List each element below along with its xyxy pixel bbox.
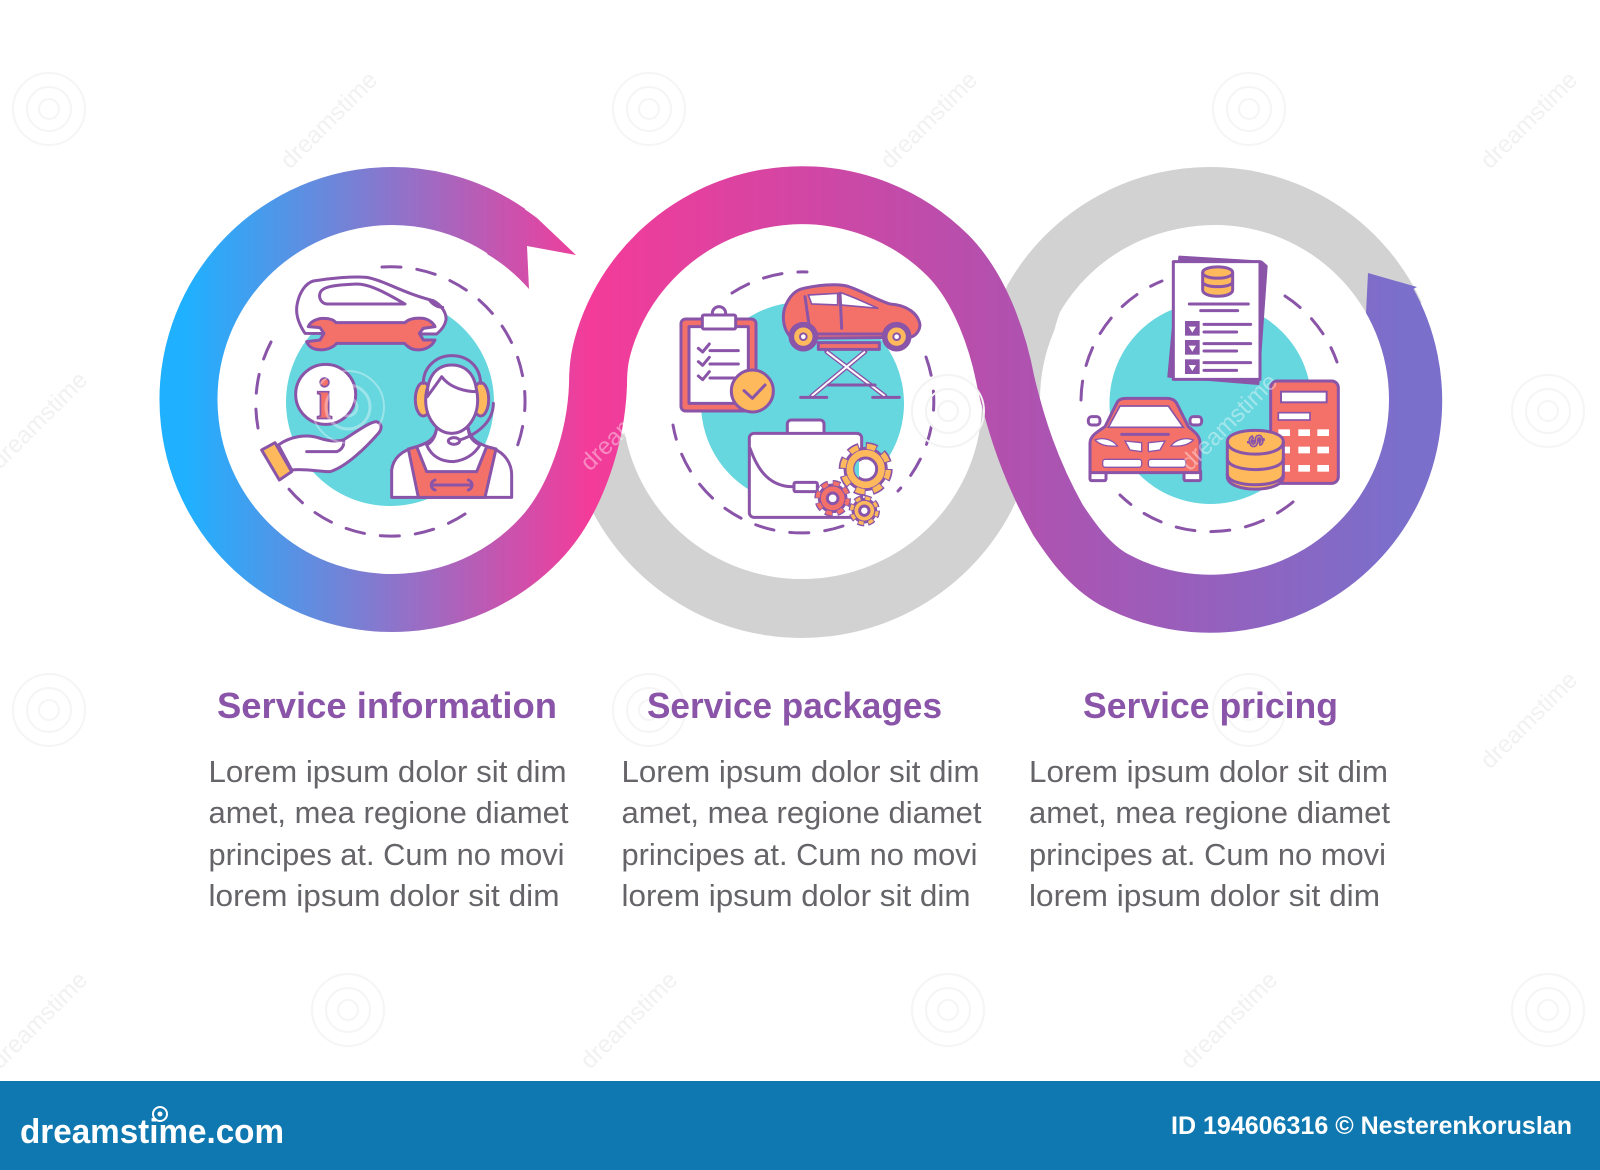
icon: price document	[1168, 257, 1267, 384]
icon: medium gear	[818, 483, 848, 513]
icons: clipboard, lift, briefcase	[681, 285, 920, 523]
footer credit: ID 194606316 © Nesterenkoruslan	[1171, 1112, 1572, 1140]
text block: service information: Lorem ipsum dolor sit dim	[208, 754, 566, 789]
panel: service packages icon	[673, 272, 934, 533]
watermark overlays: dreamstime	[575, 368, 683, 476]
text block: service pricing: Lorem ipsum dolor sit dim	[1029, 754, 1388, 789]
icon: coin stack	[1227, 430, 1283, 489]
dashed orbit 1	[256, 267, 525, 536]
heading: service packages: Service packages	[647, 685, 942, 726]
icon: briefcase with gears	[749, 420, 888, 523]
text block: service pricing	[1029, 754, 1390, 913]
text block: service information: principes at. Cum no movi	[208, 837, 564, 872]
dashed orbit 3	[1081, 281, 1337, 532]
icon: car top view	[297, 277, 446, 334]
text block: service information	[208, 754, 569, 913]
icon: open hand	[262, 422, 381, 480]
panel: service pricing icon	[1081, 257, 1338, 532]
text block: service information: lorem ipsum dolor sit dim	[208, 878, 560, 913]
watermark overlays: dreamstime	[1175, 368, 1283, 476]
text block: service packages: Lorem ipsum dolor sit dim	[622, 754, 980, 789]
heading: service information: Service information	[217, 685, 557, 726]
text block: service pricing: amet, mea regione diamet	[1029, 795, 1390, 830]
text: dreamstime	[575, 966, 683, 1074]
text: dreamstime	[875, 66, 983, 174]
icon: calculator	[1271, 381, 1338, 483]
teal backdrop 3	[1110, 302, 1312, 504]
footer logo: dreamstime.com	[20, 1113, 284, 1151]
icon: car on lift	[783, 285, 920, 397]
icon: info circle: i	[316, 366, 332, 431]
text: dreamstime	[275, 66, 383, 174]
text block: service pricing: lorem ipsum dolor sit dim	[1029, 878, 1380, 913]
text: dreamstime	[1475, 66, 1583, 174]
text block: service pricing: principes at. Cum no movi	[1029, 837, 1386, 872]
icon: clipboard	[681, 307, 773, 412]
icon: small gear	[852, 498, 877, 523]
panel: service information icon	[256, 267, 525, 536]
text block: service packages: amet, mea regione diamet	[622, 795, 982, 830]
white trim on right of third ring	[1214, 225, 1389, 574]
text block: service packages: lorem ipsum dolor sit dim	[622, 878, 970, 913]
icon: car front	[1088, 398, 1202, 481]
footer banner	[0, 1081, 1600, 1170]
text block: service packages	[622, 754, 982, 913]
inner white circles	[218, 224, 1389, 579]
dashed orbit 2	[673, 272, 934, 533]
heading: service pricing: Service pricing	[1083, 685, 1338, 726]
watermark overlays	[312, 368, 1283, 476]
icon: large gear	[843, 446, 888, 492]
text: dreamstime	[1175, 966, 1283, 1074]
icon: info circle	[296, 364, 356, 431]
icons: car, wrench, info, mechanic	[262, 277, 512, 497]
text block: service packages: principes at. Cum no movi	[622, 837, 978, 872]
icon: wrench	[307, 318, 435, 350]
text block: service information: amet, mea regione diamet	[208, 795, 569, 830]
text: dreamstime	[1475, 666, 1583, 774]
icon: coin stack: $	[1243, 434, 1267, 448]
grey background ribbon	[598, 196, 1395, 608]
icons: document, car, calculator, coins	[1088, 257, 1338, 489]
teal backdrop 1	[286, 298, 494, 506]
icon: mechanic with headset	[392, 356, 512, 497]
teal backdrop 2	[701, 302, 904, 505]
gradient ribbon	[188, 195, 1417, 604]
